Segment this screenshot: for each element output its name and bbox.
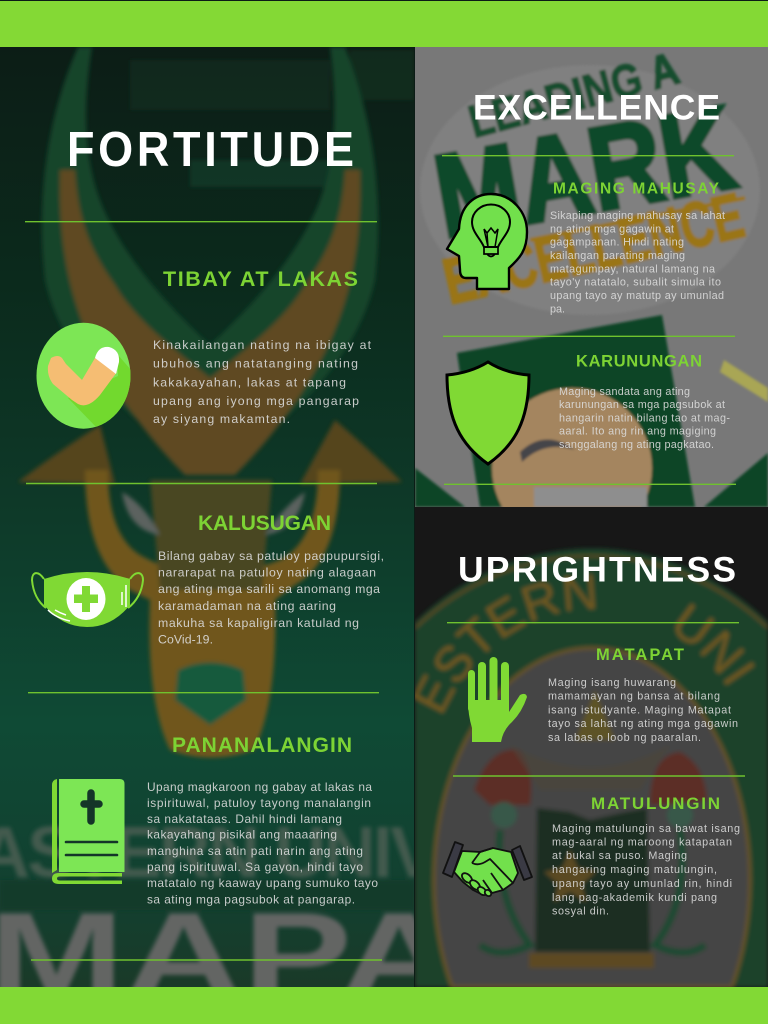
text: kalusugan body: Bilang gabay sa patuloy pagpupursigi, (158, 549, 384, 563)
text: kalusugan body: makuha sa kapaligiran katulad ng (158, 616, 359, 630)
icon: holy book (52, 779, 124, 884)
text: karunungan body: sanggalang ng ating pagkatao. (559, 439, 714, 451)
text: karunungan body: karunungan sa mga pagsubok at (559, 399, 725, 411)
icon: flexed arm (36, 323, 131, 429)
text: matapat body: sa labas o loob ng paaralan. (548, 732, 701, 744)
text: karunungan body: Maging sandata ang ating (559, 386, 690, 398)
section: pananalangin (52, 734, 378, 906)
text: kalusugan body: CoVid-19. (158, 632, 213, 646)
background: uprightness panel: UNI (672, 601, 757, 688)
text: pananalangin body: Upang magkaroon ng gabay at lakas na (147, 780, 372, 794)
text: tibay at lakas body (153, 338, 372, 426)
subheading: matulungin: MATULUNGIN (591, 794, 720, 813)
top green bar (0, 1, 768, 47)
subheading: pananalangin: PANANALANGIN (172, 734, 352, 757)
text: maging mahusay body: pa. (550, 303, 565, 315)
section: matulungin (443, 794, 740, 918)
text: tibay at lakas body: Kinakailangan nating na ibigay at (153, 338, 372, 352)
subheading: matapat: MATAPAT (596, 646, 684, 664)
text: matulungin body: Maging matulungin sa bawat isang (552, 823, 740, 835)
text: matapat body (548, 677, 738, 744)
text: kalusugan body: ang ating mga sarili sa anomang mga (158, 582, 380, 596)
text: matulungin body (552, 823, 740, 918)
text: matulungin body: upang tayo ay umunlad rin, hindi (552, 878, 732, 890)
text: maging mahusay body: ng ating mga gagawin at (550, 223, 674, 235)
text: pananalangin body: ispirituwal, patuloy tayong manalangin (147, 796, 371, 810)
icon: head with light bulb (447, 194, 527, 289)
text: maging mahusay body: matagumpay, natural lamang na (550, 263, 715, 275)
background: uprightness panel: ESTERN (415, 572, 598, 716)
text: maging mahusay body: tayo'y natatalo, subalit simula ito (550, 277, 721, 289)
text: kalusugan body: nararapat na patuloy nating alagaan (158, 566, 376, 580)
section: karunungan (447, 352, 730, 464)
icon: shield (447, 362, 529, 464)
text: maging mahusay body: Sikaping maging mahusay sa lahat (550, 210, 725, 222)
text: karunungan body (559, 386, 730, 451)
text: matulungin body: lang pag-akademik kundi pang (552, 892, 717, 904)
text: tibay at lakas body: ay siyang makamtan. (153, 412, 290, 426)
background: uprightness panel (415, 507, 768, 987)
background: fortitude panel (0, 47, 414, 987)
background: excellence panel (415, 42, 768, 548)
text: pananalangin body (147, 780, 378, 906)
text: pananalangin body: matatalo ng kaaway upang sumuko tayo (147, 876, 378, 890)
text: pananalangin body: kakayahang pisikal ang maaaring (147, 828, 337, 842)
text: tibay at lakas body: upang ang iyong mga pangarap (153, 394, 359, 408)
text: pananalangin body: manghina sa atin pati narin ang ating (147, 844, 363, 858)
text: pananalangin body: pang ispirituwal. Sa gayon, hindi tayo (147, 860, 363, 874)
text: matapat body: tayo sa lahat ng ating mga gagawin (548, 718, 738, 730)
text: maging mahusay body: gagampanan. Hindi nating (550, 237, 684, 249)
text: matulungin body: at bukal sa puso. Maging (552, 850, 687, 862)
text: matapat body: isang istudyante. Maging Matapat (548, 704, 731, 716)
text: pananalangin body: sa ating mga pagsubok at pangarap. (147, 892, 355, 906)
panel: fortitude (25, 122, 384, 960)
section: tibay at lakas (36, 267, 372, 429)
text: matulungin body: mag-aaral ng maroong katapatan (552, 836, 732, 848)
heading: uprightness: UPRIGHTNESS (458, 550, 736, 590)
subheading: maging mahusay: MAGING MAHUSAY (553, 180, 720, 198)
heading: fortitude: FORTITUDE (67, 122, 354, 178)
bottom green bar (0, 987, 768, 1024)
text: matulungin body: hangaring maging matulungin, (552, 864, 717, 876)
panel: excellence (442, 88, 736, 484)
text: karunungan body: hangarin natin bilang tao at mag- (559, 412, 730, 424)
text: karunungan body: aaral. Ito ang rin ang magiging (559, 426, 716, 438)
text: matulungin body: sosyal din. (552, 906, 609, 918)
background: excellence panel: LEADING A (463, 42, 684, 148)
text: tibay at lakas body: ubuhos ang natatanging nating (153, 356, 358, 370)
text: pananalangin body: sa nakatataas. Dahil hindi lamang (147, 812, 342, 826)
subheading: tibay at lakas: TIBAY AT LAKAS (163, 267, 358, 291)
text: matapat body: Maging isang huwarang (548, 677, 676, 689)
text: kalusugan body (158, 549, 384, 646)
text: tibay at lakas body: kakakayahan, lakas at tapang (153, 376, 346, 390)
subheading: karunungan: KARUNUNGAN (576, 352, 702, 370)
panel: uprightness (443, 550, 745, 918)
text: matapat body: mamamayan ng bansa at bilang (548, 690, 720, 702)
text: kalusugan body: karamadaman na ating aaring (158, 599, 336, 613)
heading: excellence: EXCELLENCE (473, 88, 720, 128)
section: maging mahusay (447, 180, 725, 315)
icon: face mask (32, 572, 143, 627)
icon: handshake (443, 842, 532, 897)
icon: raised hand (468, 657, 527, 742)
text: maging mahusay body: kailangan parating maging (550, 250, 685, 262)
section: kalusugan (32, 512, 384, 646)
section: matapat (468, 646, 738, 744)
text: maging mahusay body (550, 210, 725, 315)
subheading: kalusugan: KALUSUGAN (198, 512, 331, 535)
text: maging mahusay body: upang tayo ay matutp ay umunlad (550, 290, 724, 302)
